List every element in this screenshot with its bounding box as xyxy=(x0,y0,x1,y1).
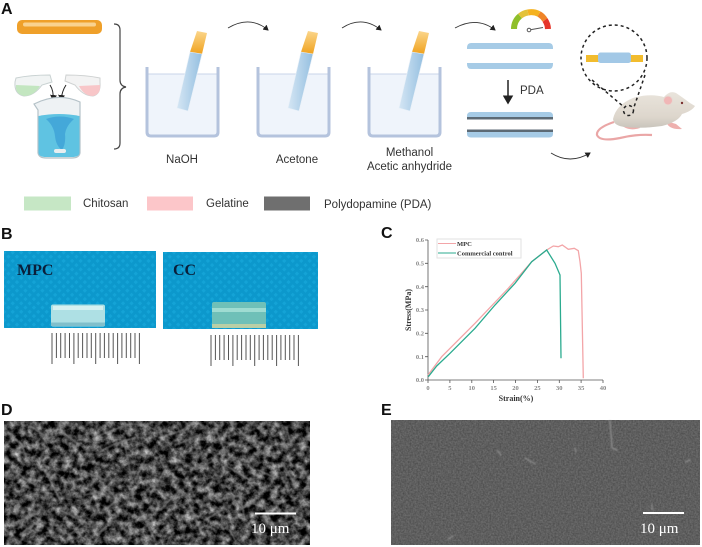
label: gelatine: Gelatine xyxy=(206,198,249,210)
x axis tick labels: 25 xyxy=(534,385,541,392)
y axis tick labels: 0.6 xyxy=(416,237,425,244)
icon: chitosan flask xyxy=(15,75,52,96)
panel B: photographs xyxy=(1,226,318,366)
x axis tick labels xyxy=(426,385,606,392)
panel C: stress-strain chart xyxy=(381,225,606,403)
layered conduit with PDA xyxy=(467,112,553,138)
icon: gelatine flask xyxy=(65,75,100,96)
icon: mouse xyxy=(597,92,695,139)
photo: CC xyxy=(163,252,318,329)
label: chitosan: Chitosan xyxy=(83,198,128,210)
y axis tick labels: 0.5 xyxy=(416,260,425,268)
x axis tick labels: 40 xyxy=(600,385,606,392)
swatch: polydopamine xyxy=(264,196,310,210)
axis title: stress: Stress(MPa) xyxy=(404,289,413,331)
heading E: E xyxy=(381,402,392,419)
x axis tick labels: 30 xyxy=(556,385,563,392)
icon: orange rod xyxy=(17,20,102,34)
chart legend: MPC xyxy=(457,241,472,248)
curve: MPC xyxy=(428,245,583,378)
SEM micrograph: 10 μm xyxy=(640,521,679,537)
label: Methanol and acetic anhydride: Methanol xyxy=(386,147,433,159)
y axis tick labels: 0.4 xyxy=(416,284,425,291)
label: Methanol and acetic anhydride: Acetic anhydride xyxy=(367,161,452,173)
chart legend: Commercial control xyxy=(457,250,513,258)
swatch: gelatine xyxy=(147,196,193,210)
y axis tick labels: 0.0 xyxy=(416,377,424,384)
panel E: SEM of commercial control xyxy=(381,402,700,545)
heading A: A xyxy=(1,1,13,18)
x axis tick labels: 10 xyxy=(469,385,475,392)
y axis tick labels: 0.1 xyxy=(416,354,424,361)
panel A: fabrication schematic xyxy=(1,1,695,173)
beaker: Methanol and acetic anhydride xyxy=(369,31,440,136)
photo: CC: CC xyxy=(173,262,196,279)
ruler: MPC xyxy=(52,333,139,364)
axis title: strain: Strain(%) xyxy=(499,394,534,403)
layered conduit before PDA xyxy=(467,43,553,69)
icon: gauge xyxy=(514,12,548,32)
photo: MPC xyxy=(4,251,156,328)
curve: commercial control xyxy=(428,250,561,377)
ruler: CC xyxy=(211,335,298,366)
x axis tick labels: 0 xyxy=(426,385,430,392)
heading C: C xyxy=(381,225,393,242)
label: Acetone: Acetone xyxy=(276,154,318,166)
y axis tick labels xyxy=(416,237,425,384)
arrows: process steps xyxy=(228,22,495,30)
x axis tick labels: 15 xyxy=(490,385,498,392)
arrow: implantation xyxy=(551,153,590,159)
SEM micrograph xyxy=(391,420,700,545)
legend xyxy=(24,196,432,211)
chart legend xyxy=(437,239,521,258)
label: PDA: PDA xyxy=(520,85,544,97)
callout: dashed magnifier xyxy=(581,25,647,116)
swatch: chitosan xyxy=(24,196,71,210)
axes xyxy=(425,240,603,383)
label: polydopamine: Polydopamine (PDA) xyxy=(324,199,432,211)
y axis tick labels: 0.2 xyxy=(416,330,424,338)
x axis tick labels: 35 xyxy=(578,385,585,392)
photo: MPC: MPC xyxy=(17,262,53,279)
arrows: pouring into beaker xyxy=(50,85,66,100)
panel D: SEM of MPC xyxy=(1,402,310,545)
label: NaOH: NaOH xyxy=(166,154,198,166)
beaker: NaOH xyxy=(147,31,218,136)
x axis tick labels: 5 xyxy=(448,385,452,392)
arrow: PDA coating xyxy=(507,80,509,103)
x axis tick labels: 20 xyxy=(512,385,519,392)
y axis tick labels: 0.3 xyxy=(416,307,425,314)
icon: implanted conduit xyxy=(586,52,643,63)
beaker: Acetone xyxy=(258,31,329,136)
brace xyxy=(114,24,126,149)
SEM micrograph xyxy=(4,421,310,545)
heading B: B xyxy=(1,226,13,243)
SEM micrograph: 10 μm xyxy=(251,521,290,537)
heading D: D xyxy=(1,402,13,419)
icon: mixing beaker xyxy=(34,97,80,158)
